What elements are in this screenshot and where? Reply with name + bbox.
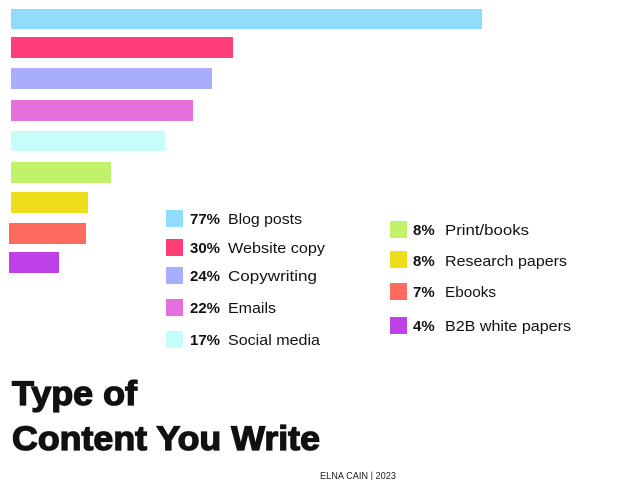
legend item: copywriting: Copywriting (228, 268, 317, 285)
legend item: print/books: 8% (413, 222, 435, 239)
legend item: B2B white papers: 4% (413, 318, 435, 335)
title (12, 375, 320, 458)
legend item: ebooks: 7% (413, 284, 435, 301)
bar: emails (11, 100, 193, 121)
bar: social media (11, 131, 165, 151)
legend: right column (390, 221, 571, 335)
bar: blog posts (11, 9, 482, 29)
bar: copywriting (11, 68, 212, 89)
legend item: blog posts (166, 210, 302, 228)
title: Content You Write (12, 420, 320, 458)
bar: research papers (11, 192, 88, 213)
legend item: research papers: 8% (413, 253, 435, 270)
legend item: B2B white papers (390, 317, 571, 335)
legend item: copywriting (166, 267, 317, 285)
legend item: social media: Social media (228, 332, 321, 349)
legend item: B2B white papers: B2B white papers (445, 318, 571, 335)
legend item: social media (166, 331, 321, 349)
legend item: social media: 17% (190, 332, 220, 349)
legend item: emails: 22% (190, 300, 220, 317)
legend item: blog posts: 77% (190, 211, 220, 228)
legend item: ebooks (390, 283, 496, 301)
legend item: research papers (390, 251, 567, 270)
legend item: website copy (166, 239, 326, 257)
legend item: research papers: Research papers (445, 253, 567, 270)
legend item: website copy: Website copy (228, 240, 326, 257)
legend item: copywriting: 24% (190, 268, 220, 285)
title: Type of (12, 375, 138, 413)
bar: print/books (11, 162, 111, 183)
legend item: ebooks: Ebooks (445, 284, 496, 301)
bar: website copy (11, 37, 233, 58)
legend item: emails: Emails (228, 300, 276, 317)
bar: B2B white papers (9, 252, 59, 273)
legend item: blog posts: Blog posts (228, 211, 302, 228)
bar chart (9, 9, 482, 273)
legend item: print/books: Print/books (445, 222, 529, 239)
legend item: emails (166, 299, 276, 317)
legend: left column (166, 210, 326, 349)
legend item: print/books (390, 221, 529, 239)
bar: ebooks (9, 223, 86, 244)
legend item: website copy: 30% (190, 240, 220, 257)
